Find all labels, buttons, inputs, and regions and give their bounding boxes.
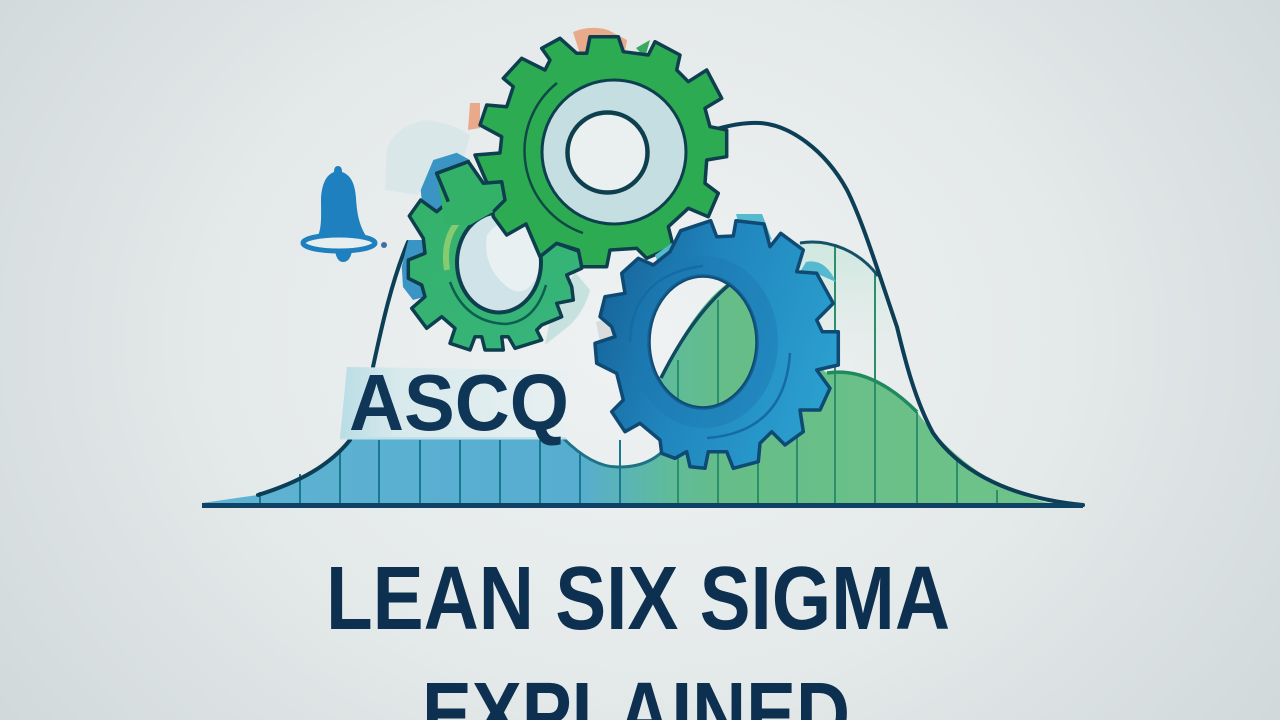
gear arc detail [525, 83, 583, 233]
small gear tooth overlapping large gear [437, 162, 505, 225]
gear hole [457, 212, 541, 312]
highlight arc on gear [446, 205, 480, 270]
chart: secondary curves [563, 242, 917, 467]
label backing panel [340, 367, 568, 438]
bell curve chart [202, 123, 1083, 508]
icon: right blue gear [595, 214, 838, 468]
soft decorative washes behind gears [385, 28, 650, 342]
icon: small left green gear [402, 153, 590, 350]
chart: shaded distribution area [202, 278, 1083, 505]
label text: ASCQ [349, 358, 569, 447]
teal fragments behind blue gear [655, 214, 836, 282]
small gear body with hole [408, 162, 582, 350]
icon: blue bell [303, 166, 387, 262]
lower arc on gear [450, 282, 546, 324]
blue gear body [595, 221, 838, 468]
blue shadow fragments on small gear [402, 153, 470, 300]
chart: pale upper hump [790, 243, 905, 372]
band arc details [630, 266, 790, 438]
chart: main bell curve line [258, 123, 1083, 505]
pale teal shade beside gear [545, 272, 590, 345]
gear light ring [542, 80, 686, 224]
title [326, 549, 950, 720]
gear hole [568, 112, 648, 192]
title line 1: LEAN SIX SIGMA [326, 549, 950, 649]
logo label: ASCQ [340, 358, 569, 447]
chart: histogram grid lines [260, 244, 997, 505]
icon: large top green gear [475, 37, 727, 267]
chart: x axis baseline [202, 503, 1083, 508]
inner darker band around hole [630, 256, 778, 428]
